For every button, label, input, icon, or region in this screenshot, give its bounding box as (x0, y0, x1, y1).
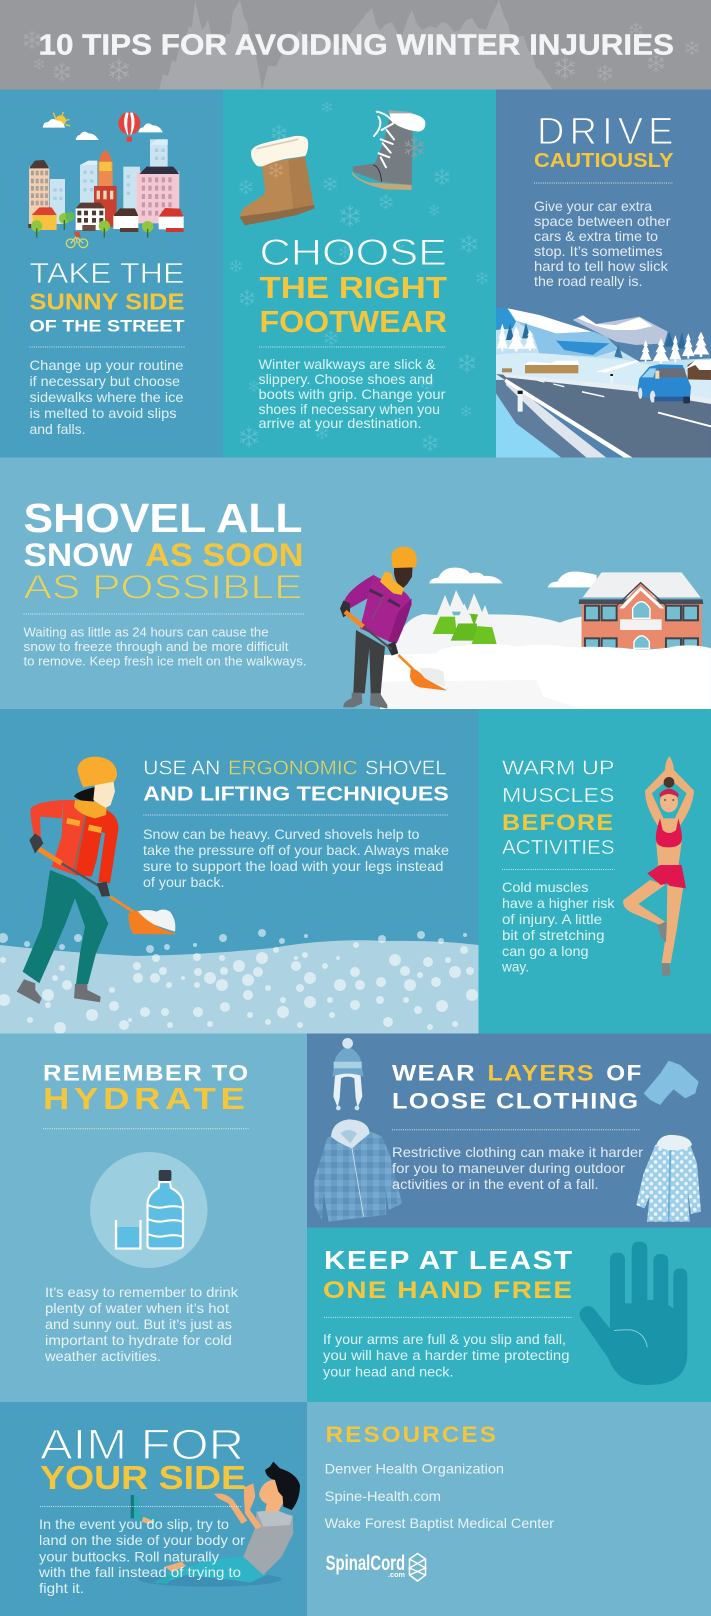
heading: shovel all snow as soon as possible: AS SOON (145, 537, 304, 573)
body text: ergonomic: take the pressure off of your back. Always make (143, 842, 449, 858)
heading: aim for your side: YOUR SIDE (40, 1459, 246, 1496)
body text: aim: In the event you do slip, try to (39, 1516, 229, 1532)
background snowflakes (230, 102, 488, 451)
heading: take the sunny side of the street: SUNNY SIDE (30, 288, 184, 314)
body text: layers: for you to maneuver during outdoor (392, 1160, 625, 1176)
body text: shovel: to remove. Keep fresh ice melt on the walkways. (24, 654, 306, 668)
heading: take the sunny side of the street: OF THE STREET (30, 316, 185, 336)
heading: choose the right footwear: THE RIGHT (260, 270, 447, 305)
body text: hand free: you will have a harder time protecting (323, 1347, 570, 1363)
body text: sunny side (30, 357, 184, 437)
body text: ergonomic (143, 826, 449, 890)
body text: aim: land on the side of your body or (39, 1532, 245, 1548)
polka dot coat (636, 1135, 701, 1222)
body text: sunny side: sidewalks where the ice (30, 389, 184, 405)
panel: choose the right footwear (223, 90, 496, 458)
heading: drive cautiously: CAUTIOUSLY (534, 150, 674, 172)
heading: wear layers of loose clothing: LAYERS (488, 1060, 595, 1086)
body text: layers: activities or in the event of a fall. (392, 1176, 598, 1192)
illustration: man falling on his side (131, 1462, 300, 1587)
body text: footwear: arrive at your destination. (258, 415, 422, 431)
heading: drive cautiously: DRIVE (537, 111, 674, 153)
body text: warm up: have a higher risk (502, 895, 616, 911)
heading: resources: RESOURCES (326, 1422, 498, 1447)
body text: sunny side: and falls. (30, 421, 86, 437)
heading: keep at least one hand free (323, 1245, 574, 1304)
heading: warm up muscles before activities: BEFORE (502, 810, 614, 835)
heading: wear layers of loose clothing: WEAR (392, 1060, 476, 1086)
snow ground with bubbles (0, 929, 478, 1034)
body text: drive: space between other (534, 213, 671, 229)
panel: drive cautiously (496, 90, 711, 460)
body text: sunny side: is melted to avoid slips (30, 405, 176, 421)
body text: hand free: your head and neck. (323, 1363, 454, 1379)
heading: drive cautiously (534, 111, 674, 172)
padded jacket (314, 1119, 402, 1222)
body text: ergonomic: of your back. (143, 874, 224, 890)
illustration: man shovelling with house (340, 547, 711, 710)
heading: remember to hydrate: REMEMBER TO (43, 1060, 250, 1086)
heading: remember to hydrate (43, 1060, 250, 1116)
body text: warm up: Cold muscles (502, 879, 588, 895)
heading: choose the right footwear (260, 232, 447, 339)
heading: wear layers of loose clothing: LOOSE CLOTHING (392, 1088, 640, 1114)
logo: SpinalCord.com: .com (388, 1572, 405, 1579)
body text: hydrate (44, 1284, 239, 1364)
heading: shovel all snow as soon as possible: SNOW (24, 537, 133, 573)
grey laced boot (352, 110, 425, 190)
body text: sunny side: if necessary but choose (30, 373, 180, 389)
heading: use an ergonomic shovel: AND LIFTING TECHNIQUES (143, 784, 449, 806)
body text: drive: stop. It’s sometimes (534, 243, 662, 259)
body text: ergonomic: sure to support the load with your legs instead (143, 858, 444, 874)
body text: hydrate: It’s easy to remember to drink (45, 1284, 239, 1300)
heading: shovel all snow as soon as possible: AS POSSIBLE (24, 568, 302, 606)
resource list: Denver Health Organization (325, 1461, 504, 1477)
body text: ergonomic: Snow can be heavy. Curved shovels help to (143, 826, 420, 842)
illustration: woman in tree pose (623, 756, 694, 977)
heading: shovel all snow as soon as possible: SHOVEL ALL (24, 495, 302, 541)
body text: aim (38, 1516, 245, 1596)
body text: layers (392, 1144, 643, 1192)
body text: hydrate: plenty of water when it’s hot (45, 1300, 229, 1316)
body text: hydrate: weather activities. (44, 1348, 161, 1364)
blue car (638, 364, 691, 403)
heading: use an ergonomic shovel (143, 758, 449, 806)
snow hills (393, 614, 582, 655)
panel: ergonomic shovel (0, 709, 478, 1034)
panel: remember to hydrate (0, 1034, 307, 1402)
heading: choose the right footwear: FOOTWEAR (260, 304, 447, 339)
heading: wear layers of loose clothing (392, 1060, 643, 1114)
pine trees (433, 590, 497, 644)
man with shovel (340, 547, 447, 709)
header tree silhouettes (159, 0, 553, 90)
icon: water bottle and glass (90, 1152, 208, 1268)
panel: shovel all snow (0, 458, 711, 710)
body text: footwear (258, 356, 446, 431)
resource list (325, 1461, 554, 1531)
heading: shovel all snow as soon as possible (24, 495, 304, 606)
heading: take the sunny side of the street: TAKE THE (30, 258, 184, 290)
body text: hydrate: and sunny out. But it’s just as (45, 1316, 232, 1332)
illustration: woman lifting shovel (17, 757, 178, 1004)
brown boot (239, 136, 315, 225)
body text: aim: with the fall instead of trying to (38, 1564, 241, 1580)
heading: warm up muscles before activities (502, 758, 614, 859)
body text: footwear: boots with grip. Change your (258, 386, 446, 402)
heading: use an ergonomic shovel: ERGONOMIC (228, 758, 358, 780)
body text: hand free (323, 1331, 570, 1379)
body text: shovel: Waiting as little as 24 hours can cause the (24, 624, 268, 640)
heading: wear layers of loose clothing: OF (606, 1060, 643, 1086)
body text: drive: Give your car extra (534, 198, 652, 214)
body text: drive: hard to tell how slick (534, 258, 669, 274)
front snow (380, 644, 711, 710)
snowy trees (497, 323, 709, 374)
resource list: Spine-Health.com (325, 1488, 441, 1504)
panel: sunny side of the street (0, 90, 223, 458)
heading: warm up muscles before activities: WARM UP (502, 758, 614, 780)
heading: aim for your side: AIM FOR (40, 1421, 244, 1469)
body text: footwear: slippery. Choose shoes and (258, 371, 433, 387)
resource list: Wake Forest Baptist Medical Center (325, 1515, 554, 1531)
house (579, 572, 703, 648)
body text: shovel (24, 624, 306, 668)
panel: aim for your side (0, 1402, 307, 1616)
body text: warm up (501, 879, 616, 974)
illustration: city skyline (28, 112, 184, 248)
body text: layers: Restrictive clothing can make it harder (392, 1144, 643, 1160)
heading: take the sunny side of the street (30, 258, 185, 336)
title: 10 TIPS FOR AVOIDING WINTER INJURIES (38, 30, 674, 62)
heading: warm up muscles before activities: ACTIVITIES (502, 837, 614, 859)
panel: resources (307, 1402, 711, 1616)
scarf (644, 1061, 699, 1105)
body text: footwear: Winter walkways are slick & (258, 356, 436, 372)
heading: aim for your side (40, 1421, 246, 1496)
clouds (429, 568, 597, 587)
heading: choose the right footwear: CHOOSE (260, 232, 447, 273)
body text: aim: fight it. (39, 1580, 84, 1596)
heading: use an ergonomic shovel: SHOVEL (365, 758, 446, 780)
body text: sunny side: Change up your routine (30, 357, 184, 373)
body text: warm up: can go a long (502, 943, 588, 959)
heading: warm up muscles before activities: MUSCLES (502, 785, 614, 807)
panel: warm up muscles (478, 709, 711, 1034)
body text: drive: cars & extra time to (534, 228, 658, 244)
illustration: winter boots (239, 110, 425, 225)
road posts (518, 374, 613, 412)
body text: hydrate: important to hydrate for cold (45, 1332, 232, 1348)
heading: use an ergonomic shovel: USE AN (143, 758, 220, 780)
panel: wear layers (307, 1034, 711, 1228)
icon: raised hand (580, 1242, 687, 1385)
heading: keep at least one hand free: KEEP AT LEAST (324, 1245, 574, 1275)
header snowflakes (23, 23, 699, 81)
body text: footwear: shoes if necessary when you (258, 401, 440, 417)
illustration: winter clothing (314, 1038, 701, 1222)
body text: warm up: way. (501, 958, 529, 974)
body text: drive: the road really is. (534, 273, 642, 289)
logo: SpinalCord.com: SpinalCord (326, 1552, 405, 1575)
buildings (502, 360, 711, 380)
hat (332, 1038, 364, 1110)
heading: keep at least one hand free: ONE HAND FREE (323, 1277, 574, 1304)
road surface (496, 374, 711, 460)
body text: aim: your buttocks. Roll naturally (39, 1548, 219, 1564)
body text: warm up: of injury. A little (502, 911, 602, 927)
heading: remember to hydrate: HYDRATE (43, 1081, 250, 1116)
header banner (0, 0, 711, 90)
body text: shovel: snow to freeze through and be more difficult (24, 639, 289, 654)
body text: drive (534, 198, 671, 289)
body text: hand free: If your arms are full & you slip and fall, (323, 1331, 566, 1347)
body text: warm up: bit of stretching (502, 927, 604, 943)
illustration: winter road with car (496, 308, 711, 460)
panel: keep one hand free (307, 1228, 711, 1402)
